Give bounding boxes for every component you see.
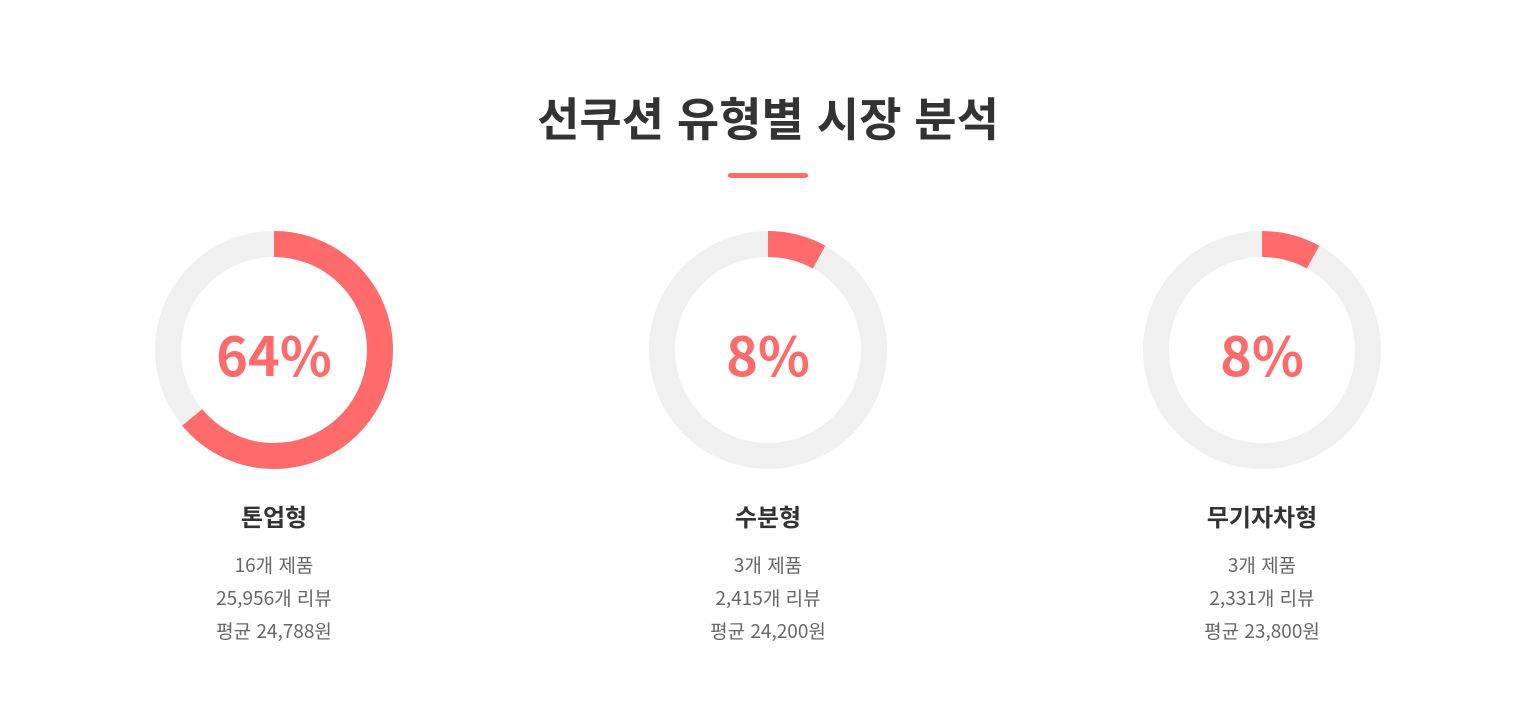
donut chart 8% [649,231,887,469]
stats: 2,331개 리뷰 [1209,584,1315,611]
percent value: 64% [216,313,332,392]
stats: 평균 24,788원 [216,617,332,644]
stats: 3개 제품 [734,551,802,578]
percent value: 8% [726,313,810,392]
percent value: 8% [1220,313,1304,392]
panel: 수분형 [649,231,887,644]
title: 선쿠션 유형별 시장 분석 [537,84,999,150]
title underline [728,173,808,178]
stats: 16개 제품 [235,551,313,578]
stats [710,551,826,644]
stats: 3개 제품 [1228,551,1296,578]
stats: 2,415개 리뷰 [715,584,821,611]
donut chart 64% [155,231,393,469]
panel: 톤업형 [155,231,393,644]
stats [216,551,332,644]
stats [1204,551,1320,644]
category name: 톤업형 [241,498,307,533]
panel: 무기자차형 [1143,231,1381,644]
stats: 평균 23,800원 [1204,617,1320,644]
category name: 수분형 [735,498,801,533]
donut chart 8% [1143,231,1381,469]
stats: 25,956개 리뷰 [216,584,332,611]
category name: 무기자차형 [1207,498,1317,533]
stats: 평균 24,200원 [710,617,826,644]
